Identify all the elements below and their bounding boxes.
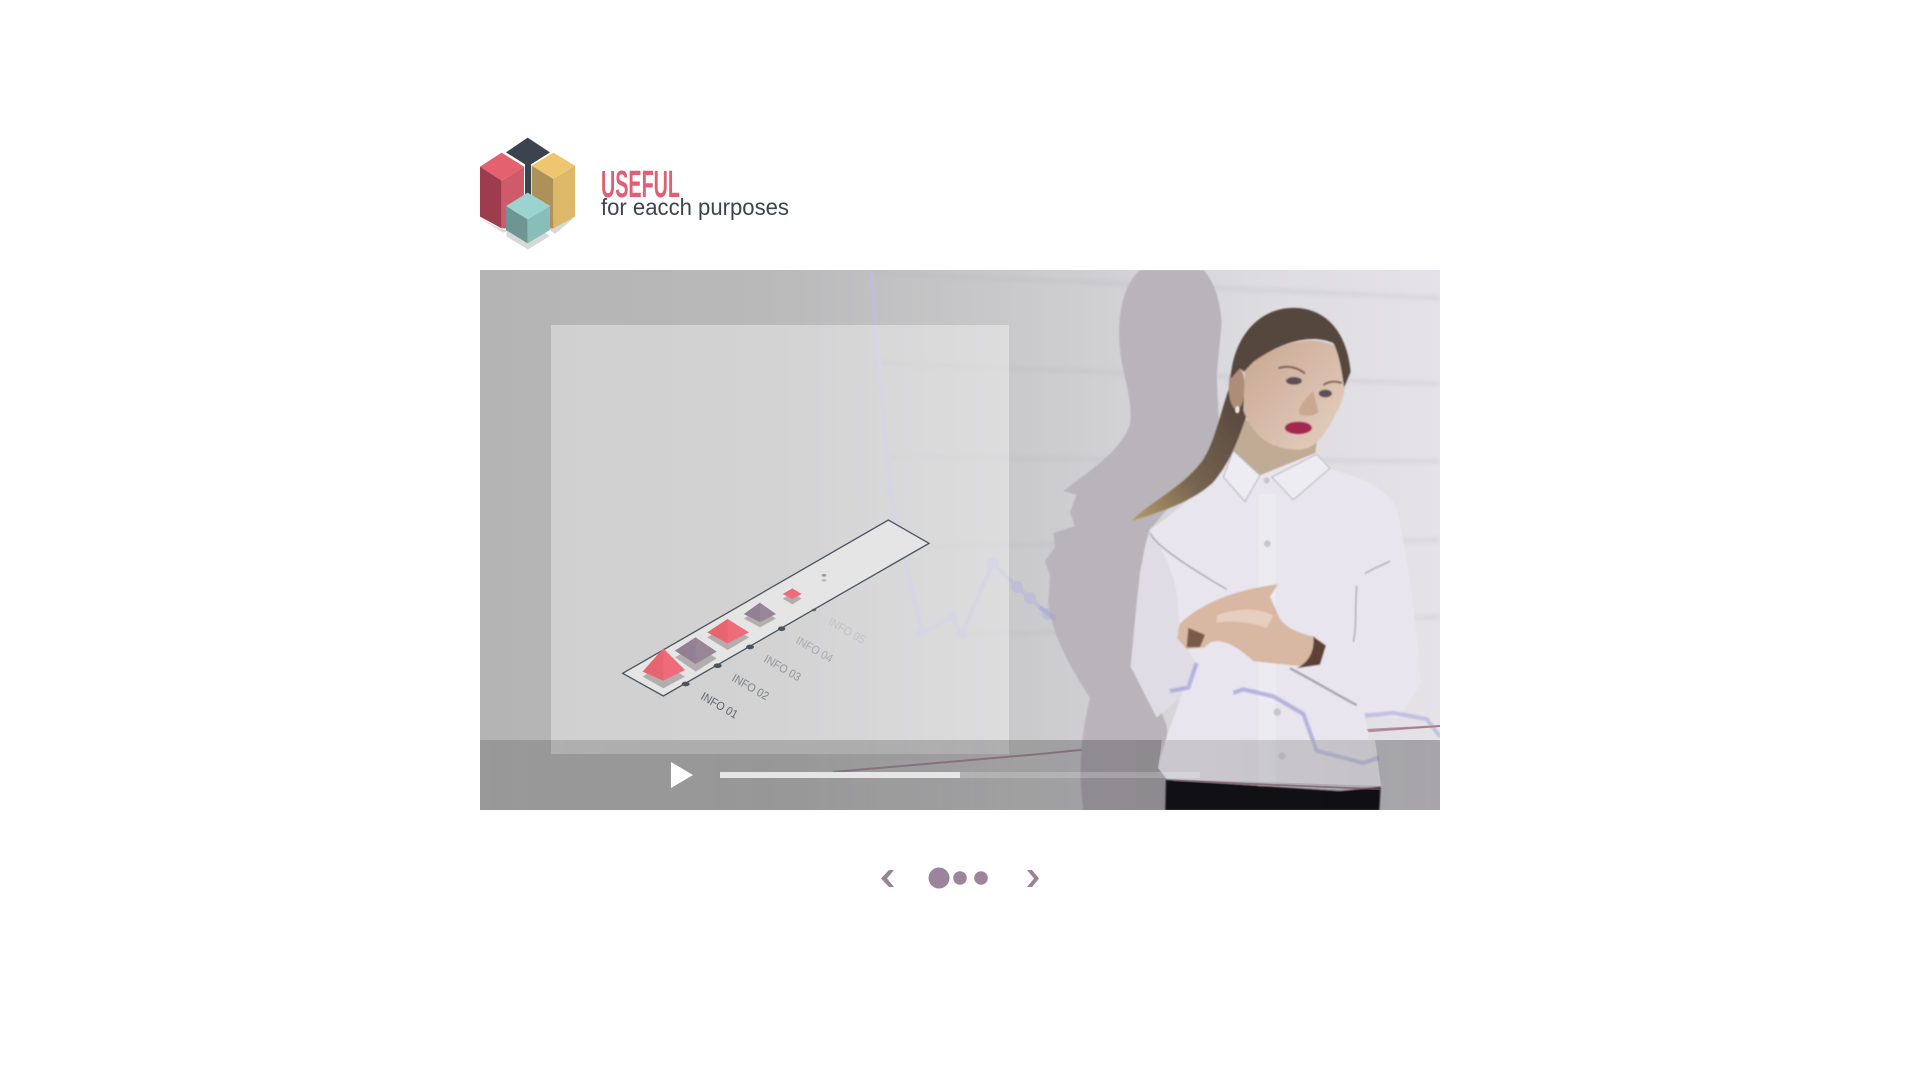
progress fill: [720, 772, 960, 778]
trousers: [1165, 777, 1381, 810]
ear: [1229, 366, 1245, 409]
pyramid 02: [675, 637, 717, 672]
chart line projected on shirt: [1040, 607, 1440, 763]
shirt buttons: [1264, 477, 1286, 760]
logo: [480, 138, 789, 249]
icon: isometric cubes: [480, 138, 575, 249]
pyramid 06 tiny: [822, 574, 826, 582]
red line on shirt: [1173, 726, 1440, 789]
icon: play button: [671, 762, 693, 788]
presenter figure: [1131, 308, 1421, 810]
shirt placket: [1258, 785, 1266, 788]
player control bar: [480, 740, 1440, 810]
shirt crease shadows: [1150, 533, 1390, 705]
axis dots: [682, 609, 816, 686]
label INFO 01: INFO 01: [698, 691, 740, 722]
lips: [1285, 422, 1312, 434]
translucent panel: [551, 325, 1009, 754]
presenter photo illustration: [1040, 270, 1440, 810]
ponytail: [1132, 389, 1247, 522]
neck: [1233, 410, 1317, 477]
carousel navigation: [881, 868, 1039, 888]
icon: previous arrow: [881, 870, 894, 887]
face: [1243, 341, 1345, 450]
progress track: [720, 772, 1200, 778]
pagination dots: [928, 868, 988, 888]
label INFO 04: INFO 04: [793, 635, 835, 666]
label INFO 05: INFO 05: [826, 616, 867, 647]
video player: [480, 270, 1440, 810]
wall grid lines: [1322, 292, 1436, 618]
shirt: [1131, 451, 1421, 791]
pyramid 03: [707, 619, 749, 650]
shirt shading: [1132, 536, 1194, 715]
pyramid 01: [643, 648, 685, 688]
earring: [1235, 406, 1239, 413]
logo tagline: for eacch purposes: [601, 194, 789, 220]
hands: [1177, 584, 1323, 666]
video background wall: [480, 270, 1440, 810]
collar: [1223, 451, 1330, 502]
hair: [1231, 308, 1351, 388]
eyes: [1286, 377, 1302, 385]
shirt highlight through bar: [1158, 740, 1381, 786]
logo word: USEFUL: USEFUL: [601, 164, 680, 206]
label INFO 03: INFO 03: [761, 653, 803, 684]
strip base: [623, 520, 929, 696]
presenter shadow on wall: [1045, 270, 1222, 810]
eyebrows: [1278, 367, 1342, 385]
projected lavender line chart: [871, 270, 1054, 639]
icon: next arrow: [1027, 870, 1039, 887]
wall red trend line: [833, 726, 1440, 772]
isometric bar strip chart: [623, 520, 929, 722]
label INFO 02: INFO 02: [729, 672, 771, 703]
pyramid 04: [744, 603, 776, 627]
pyramid 05: [783, 588, 802, 604]
nose shadow: [1299, 391, 1318, 416]
